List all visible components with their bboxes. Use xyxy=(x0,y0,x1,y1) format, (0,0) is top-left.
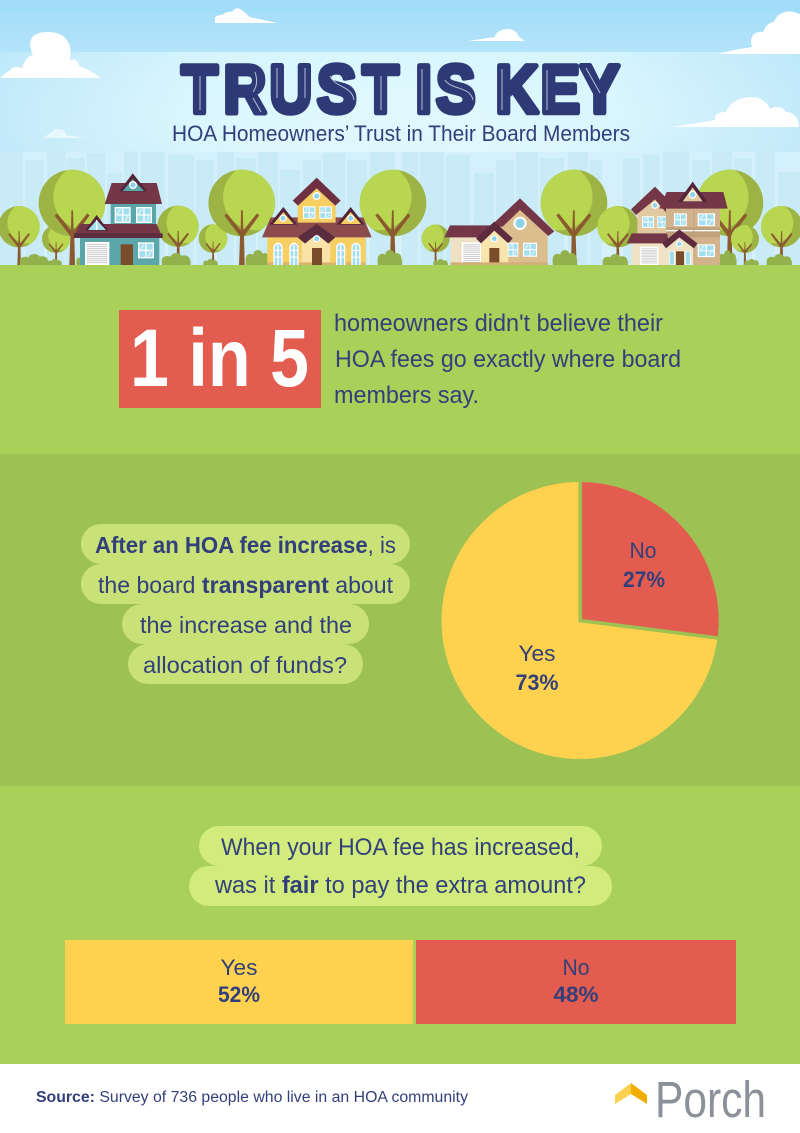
question: transparency: the increase and the xyxy=(140,612,352,638)
house: two-storey cream and tan xyxy=(627,182,728,265)
question: fairness: was it fair to pay the extra amount? xyxy=(214,872,586,899)
source note: Source: Survey of 736 people who live in an HOA community xyxy=(36,1089,468,1106)
house: yellow xyxy=(262,178,372,265)
cloud: top right small xyxy=(468,29,525,41)
title: TRUST IS KEY xyxy=(181,51,619,127)
bushes xyxy=(20,250,792,266)
section: fairness background xyxy=(0,786,800,1064)
pie label: yes: 73% xyxy=(516,670,558,695)
house: tan xyxy=(444,198,554,265)
footer background xyxy=(0,1064,800,1133)
cloud: small faint xyxy=(42,129,87,138)
pie label: no xyxy=(623,538,665,592)
stat description: HOA fees go exactly where board xyxy=(335,346,681,373)
pie label: no: 27% xyxy=(623,567,665,592)
stacked bar: no xyxy=(416,940,736,1024)
stacked bar: yes xyxy=(65,940,413,1024)
section: 1 in 5 background xyxy=(0,265,800,454)
cloud: right mid xyxy=(673,97,799,127)
question: transparency: allocation of funds? xyxy=(143,652,347,678)
trees left of centre xyxy=(0,164,426,265)
skyline of city buildings xyxy=(0,130,800,265)
stacked bar: yes: Yes xyxy=(220,955,258,980)
pie chart xyxy=(442,480,722,759)
cloud: top left large xyxy=(0,32,101,78)
stacked bar: no: No xyxy=(562,955,590,980)
stacked bar: no: 48% xyxy=(554,982,598,1007)
pie label: no: No xyxy=(630,538,656,563)
logo: Porch: Porch xyxy=(655,1071,766,1128)
house: teal xyxy=(73,173,163,265)
stat description xyxy=(334,310,681,409)
logo: Porch xyxy=(615,1071,766,1128)
question: transparency xyxy=(81,524,410,684)
question: fairness xyxy=(189,826,612,906)
stat description: homeowners didn't believe their xyxy=(334,310,663,337)
cloud: top centre xyxy=(215,8,277,23)
section: transparency background xyxy=(0,454,800,786)
stacked bar: yes: 52% xyxy=(218,982,260,1007)
stat box: 1 in 5: 1 in 5 xyxy=(130,313,309,404)
trees right of centre xyxy=(416,164,800,265)
question: transparency: the board transparent about xyxy=(98,572,394,598)
subtitle: HOA Homeowners’ Trust in Their Board Members xyxy=(172,121,630,146)
question: fairness: When your HOA fee has increased, xyxy=(221,834,580,861)
pie label: yes: Yes xyxy=(518,641,556,666)
question: transparency: After an HOA fee increase, is xyxy=(95,532,396,558)
stat description: members say. xyxy=(334,382,479,409)
sky background xyxy=(0,0,800,270)
light sky band behind title xyxy=(0,52,800,152)
cloud: top right large xyxy=(718,11,800,54)
pie label: yes xyxy=(516,641,558,695)
